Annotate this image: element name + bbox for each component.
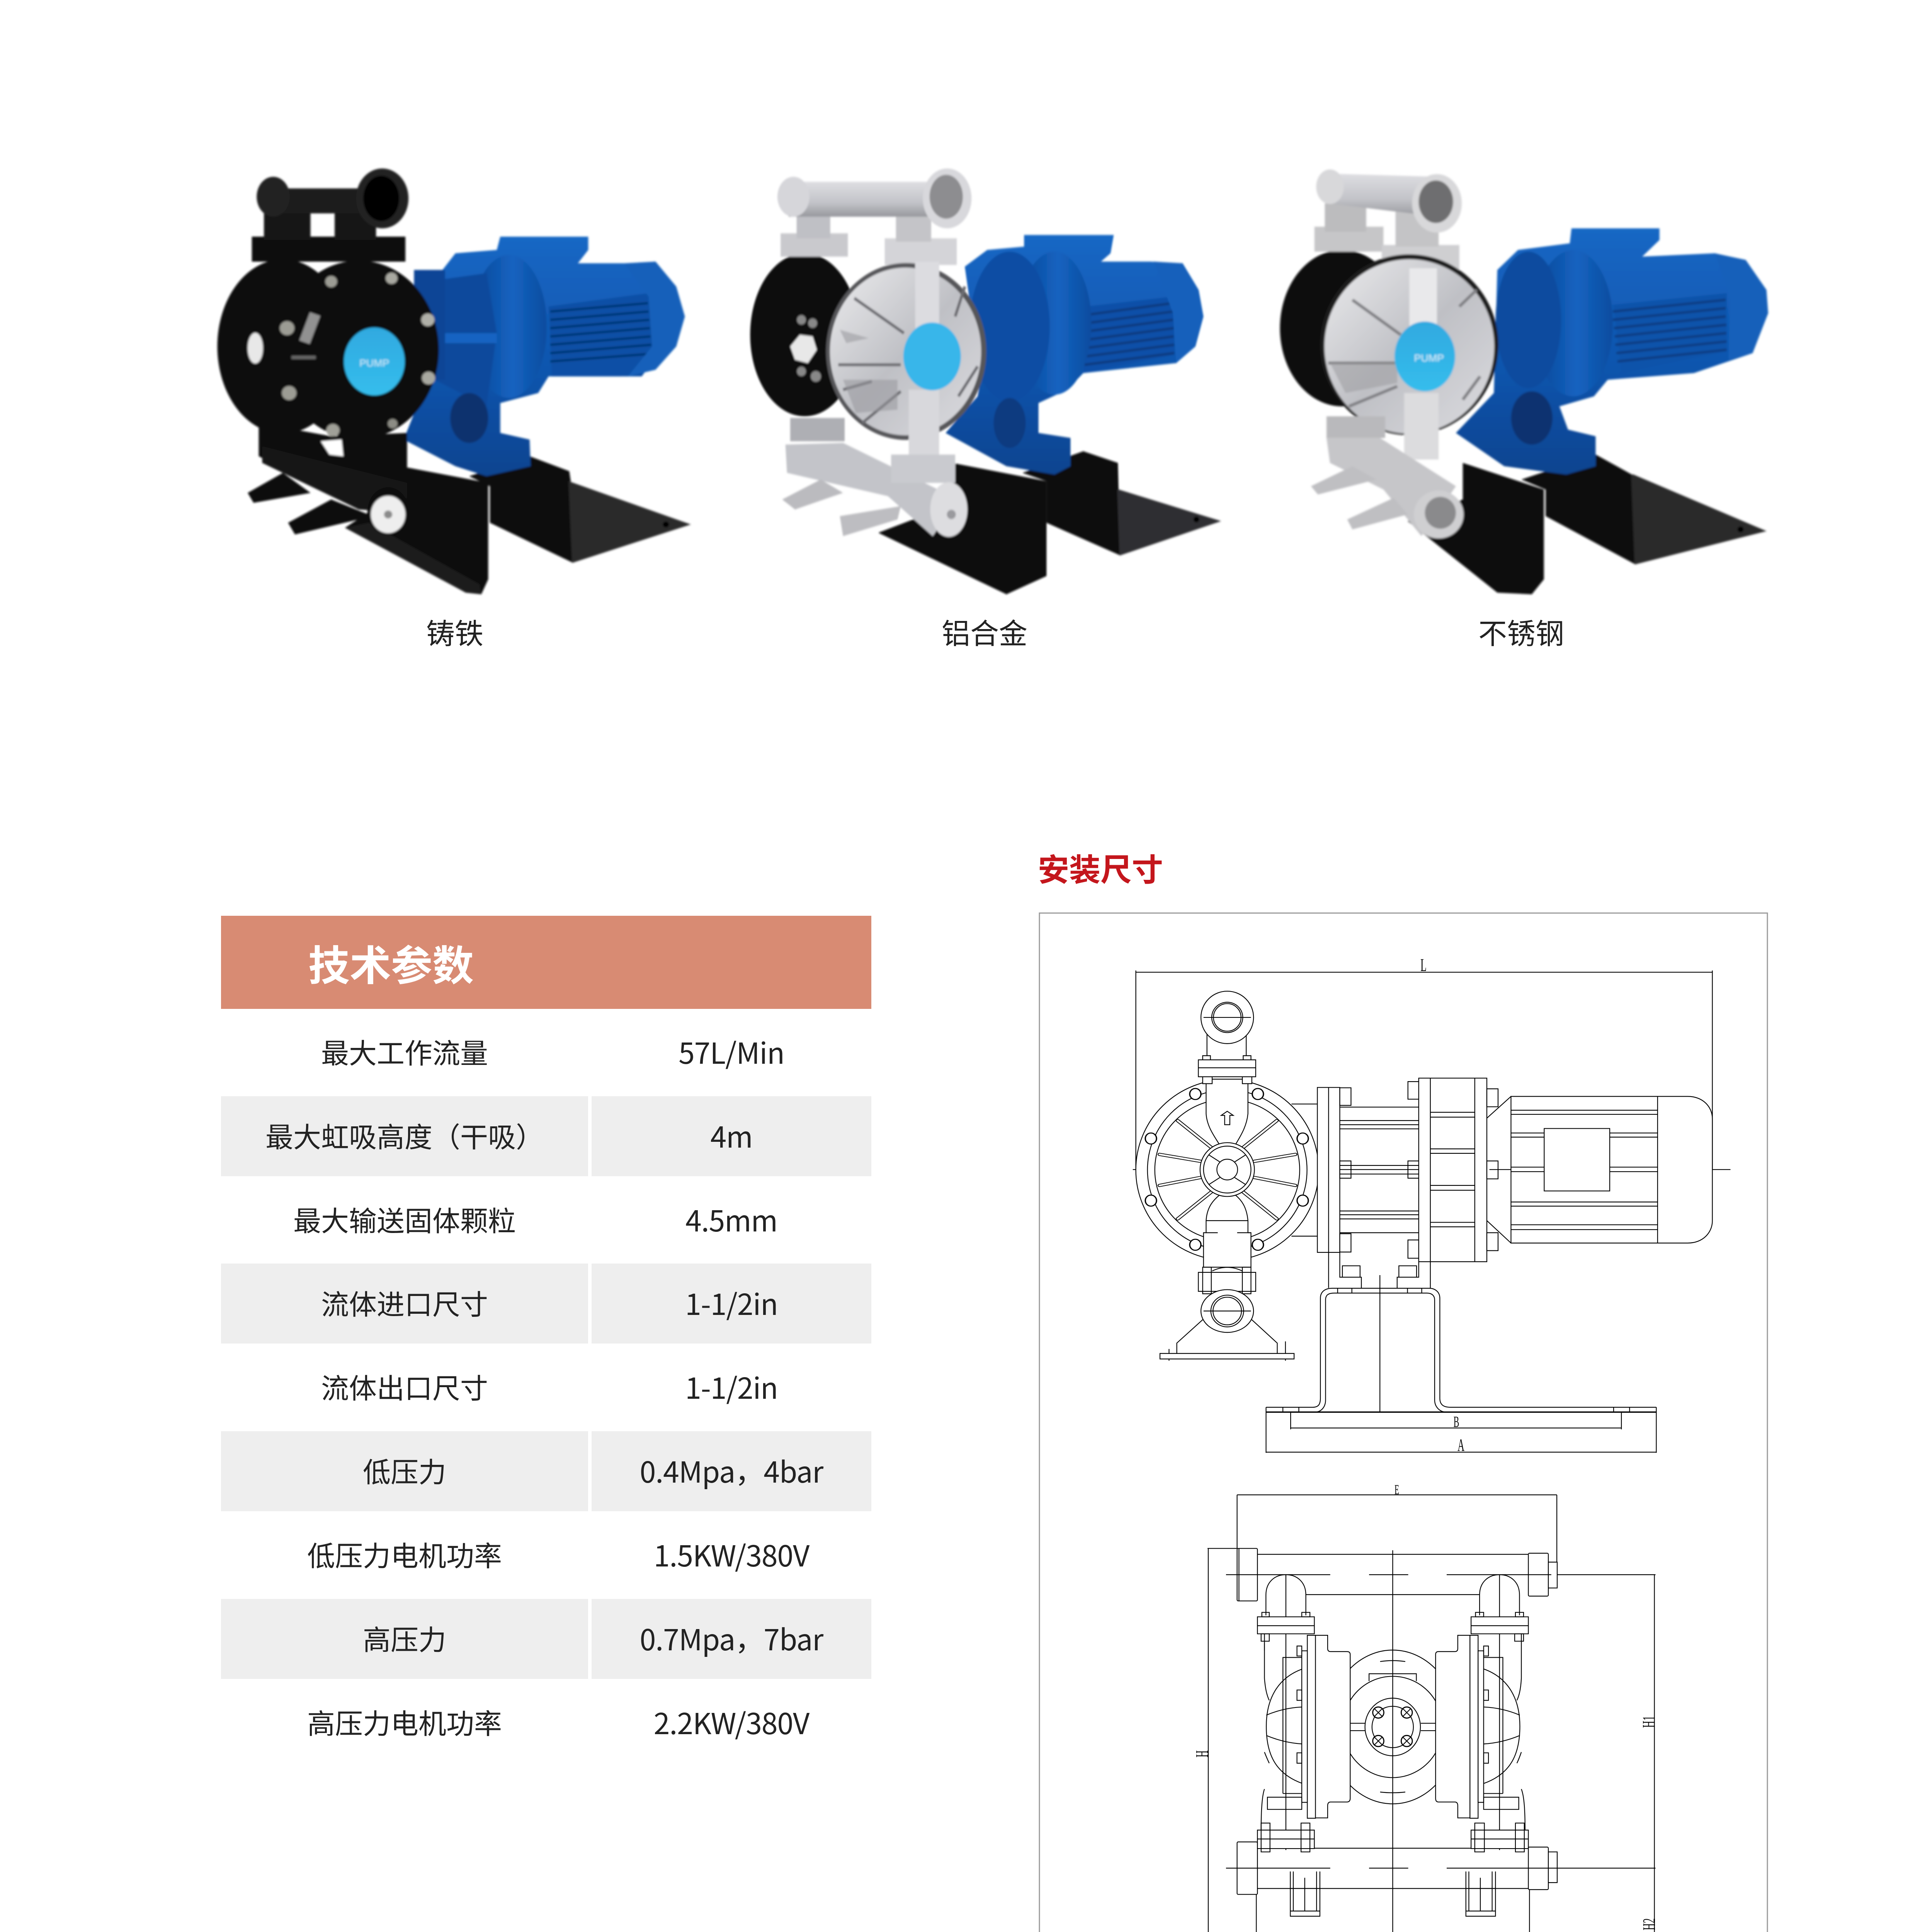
- row: max solids: [221, 1180, 871, 1260]
- dimension label: H1: H1: [1639, 1716, 1659, 1728]
- dimension label: A: A: [1458, 1435, 1464, 1455]
- dimension label: E: E: [1395, 1482, 1399, 1498]
- dimension label: B: B: [1454, 1413, 1459, 1430]
- product photo: stainless steel pump: [1280, 170, 1768, 594]
- heading: installation dimensions: 安装尺寸: [1038, 845, 1163, 890]
- drawing: pump end elevation: [1208, 1495, 1655, 1932]
- row: low pressure: 0.4Mpa，4bar: [640, 1449, 823, 1491]
- caption: cast iron: 铸铁: [426, 611, 483, 652]
- row: high pressure: [221, 1599, 871, 1679]
- row: max suction lift: 4m: [710, 1114, 753, 1156]
- row: max flow: [221, 1012, 871, 1092]
- product photo: stainless steel pump: PUMP: [1414, 352, 1444, 364]
- product photo: cast iron pump: [218, 168, 691, 594]
- row: outlet size: [221, 1347, 871, 1427]
- dimension label: H: H: [1192, 1750, 1212, 1757]
- row: low pressure motor power: 低压力电机功率: [307, 1534, 502, 1574]
- row: high pressure: 高压力: [363, 1617, 446, 1658]
- heading: technical parameters: [221, 916, 871, 1009]
- row: max solids: 最大输送固体颗粒: [293, 1199, 516, 1239]
- caption: aluminium alloy: 铝合金: [942, 611, 1027, 652]
- drawing: pump side elevation: [1133, 971, 1730, 1453]
- row: low pressure: 低压力: [363, 1450, 446, 1490]
- row: inlet size: [221, 1264, 871, 1344]
- row: max suction lift: 最大虹吸高度（干吸）: [265, 1115, 544, 1155]
- row: outlet size: 1-1/2in: [685, 1365, 778, 1407]
- row: low pressure: [221, 1431, 871, 1511]
- panel: installation drawing frame: [1039, 913, 1767, 1932]
- row: max flow: 57L/Min: [679, 1030, 784, 1072]
- heading: technical parameters: 技术参数: [308, 932, 474, 992]
- row: high pressure motor power: 2.2KW/380V: [654, 1701, 809, 1743]
- product photo: aluminium alloy pump: [750, 168, 1221, 594]
- row: inlet size: 1-1/2in: [685, 1281, 778, 1323]
- row: max flow: 最大工作流量: [321, 1031, 488, 1071]
- row: max solids: 4.5mm: [685, 1198, 777, 1240]
- row: low pressure motor power: [221, 1515, 871, 1595]
- panel: technical parameters: [221, 916, 871, 1763]
- row: max suction lift: [221, 1096, 871, 1176]
- row: high pressure motor power: 高压力电机功率: [307, 1701, 502, 1742]
- row: low pressure motor power: 1.5KW/380V: [654, 1533, 809, 1575]
- row: high pressure: 0.7Mpa，7bar: [640, 1617, 823, 1659]
- row: outlet size: 流体出口尺寸: [321, 1366, 488, 1406]
- caption: stainless steel: 不锈钢: [1478, 611, 1564, 652]
- row: high pressure motor power: [221, 1683, 871, 1763]
- product photo: cast iron pump: PUMP: [359, 357, 389, 369]
- dimension label: H2: H2: [1639, 1918, 1659, 1930]
- dimension label: L: L: [1420, 955, 1427, 975]
- row: inlet size: 流体进口尺寸: [321, 1282, 488, 1323]
